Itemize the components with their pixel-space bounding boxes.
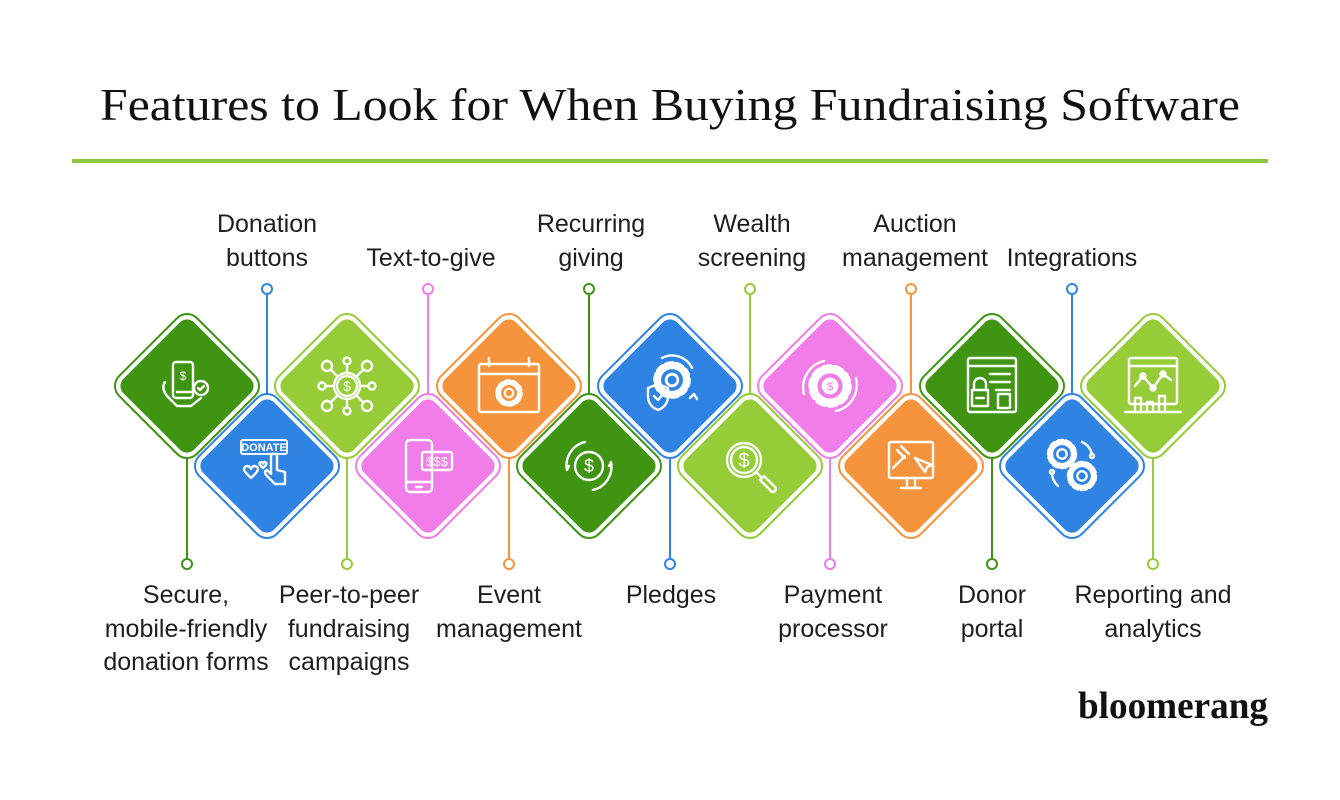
bottom labels: Event <box>477 581 541 609</box>
bottom labels: fundraising <box>288 615 410 643</box>
diamond: donor portal <box>914 308 1070 464</box>
top labels: Auction <box>873 210 957 238</box>
diamond: wealth screening: $ <box>738 450 750 472</box>
bottom labels: analytics <box>1104 615 1202 643</box>
bottom labels: management <box>436 615 582 643</box>
diamond: peer-to-peer: $ <box>343 378 351 394</box>
diamond: pledges <box>592 308 748 464</box>
title: Features to Look for When Buying Fundraising Software <box>100 79 1240 130</box>
diamond: mobile donation forms <box>109 308 265 464</box>
bottom labels: Pledges <box>626 581 716 609</box>
diamond: integrations <box>994 388 1150 544</box>
bottom labels: Payment <box>784 581 882 609</box>
top labels: management <box>842 244 988 272</box>
top labels: Integrations <box>1007 244 1137 272</box>
diamond: payment processor <box>752 308 908 464</box>
diamond: peer-to-peer <box>269 308 425 464</box>
top labels: Recurring <box>537 210 645 238</box>
diamond: donation buttons: DONATE <box>241 442 287 454</box>
diamond: mobile donation forms: $ <box>180 369 187 383</box>
diamond: text-to-give: $$$ <box>426 454 449 469</box>
top labels <box>217 210 1137 272</box>
diamond: donation buttons <box>189 388 345 544</box>
diamond: payment processor: $ <box>827 381 833 393</box>
bottom labels: Reporting and <box>1074 581 1232 609</box>
diamond: wealth screening <box>672 388 828 544</box>
diamond: recurring giving <box>511 388 667 544</box>
bottom labels <box>103 581 1232 676</box>
bottom labels: Donor <box>958 581 1026 609</box>
top labels: Text-to-give <box>366 244 496 272</box>
diamond: reporting and analytics <box>1075 308 1231 464</box>
diamond: text-to-give <box>350 388 506 544</box>
bottom labels: processor <box>778 615 888 643</box>
diamond: recurring giving: $ <box>584 456 594 476</box>
logo: bloomerang <box>1078 685 1268 727</box>
bottom labels: Peer-to-peer <box>279 581 419 609</box>
bottom labels: portal <box>961 615 1023 643</box>
diamond: auction management <box>833 388 989 544</box>
top labels: giving <box>558 244 624 272</box>
bottom labels: donation forms <box>103 648 269 676</box>
top labels: Donation <box>217 210 317 238</box>
top labels: buttons <box>226 244 308 272</box>
top labels: screening <box>698 244 806 272</box>
bottom labels: mobile-friendly <box>105 615 268 643</box>
connectors <box>182 284 1158 569</box>
bottom labels: campaigns <box>289 648 409 676</box>
diamond: event management <box>431 308 587 464</box>
bottom labels: Secure, <box>143 581 229 609</box>
top labels: Wealth <box>713 210 791 238</box>
